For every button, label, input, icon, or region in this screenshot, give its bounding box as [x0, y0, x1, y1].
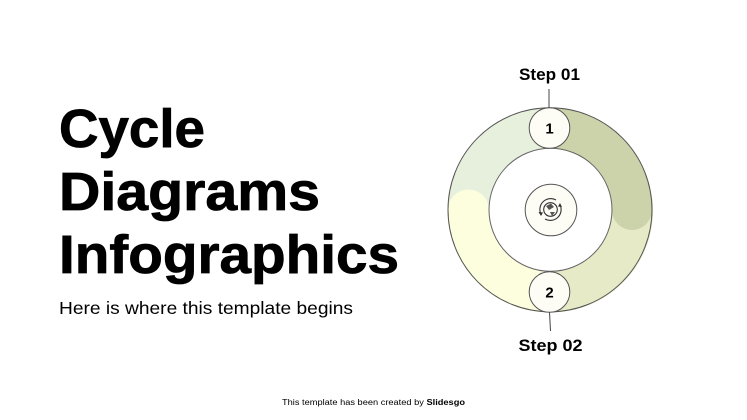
subtitle: Here is where this template begins: [59, 298, 353, 318]
segment: top left pale green: [468, 128, 550, 210]
node 1: [529, 108, 570, 148]
title: Diagrams: [59, 162, 320, 222]
title: [59, 99, 399, 285]
segment: lower left yellow: [468, 210, 550, 292]
node 2: [529, 272, 570, 312]
center circle with globe icon: [525, 184, 577, 236]
step 2 leader line: [550, 312, 551, 331]
segment: lower right lime: [550, 200, 633, 292]
step 1 leader line: [548, 89, 550, 108]
title: Infographics: [59, 225, 399, 285]
segment: top right dark green: [550, 128, 632, 210]
node 2: 2: [545, 284, 554, 302]
node 1: 1: [545, 120, 554, 138]
title: Cycle: [59, 99, 205, 159]
cycle diagram: [448, 89, 652, 331]
label: step 01: Step 01: [519, 65, 580, 84]
label: step 02: Step 02: [518, 336, 582, 355]
outer ring outline: [448, 108, 652, 312]
icon: globe with cycle arrows: [538, 199, 562, 220]
footer credit: This template has been created by Slidesgo: [282, 398, 465, 407]
inner white disc: [489, 148, 612, 271]
